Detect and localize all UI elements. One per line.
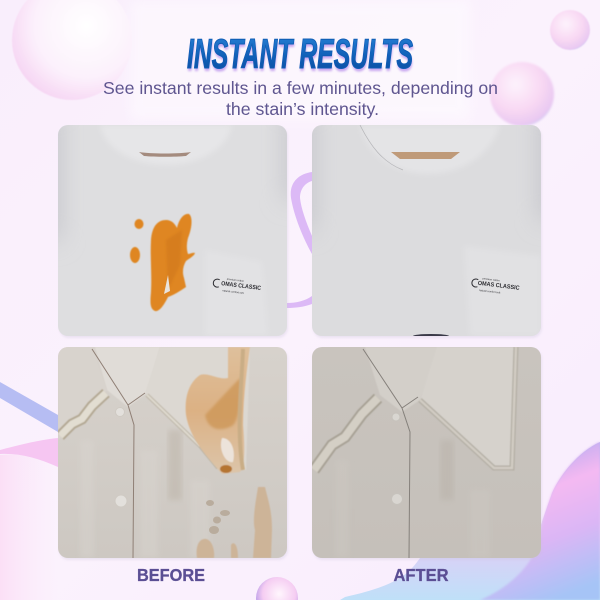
decorative wave: left pink <box>0 438 58 600</box>
shadow at hem <box>413 334 449 336</box>
shirt pocket seam <box>464 246 541 336</box>
right lace edging <box>420 347 516 468</box>
title: INSTANT RESULTS <box>188 33 414 80</box>
decorative sphere: top right <box>550 10 590 50</box>
title: INSTANT RESULTS <box>187 30 413 77</box>
shirt collar <box>139 152 191 157</box>
right collar flap <box>148 388 248 468</box>
printed logo label: premium cotton <box>482 277 500 282</box>
panel: after, clean t-shirt <box>312 125 541 336</box>
panel edge shading <box>58 126 287 236</box>
printed logo label: OMAS CLASSIC <box>477 281 520 292</box>
subtitle text: the stain’s intensity. <box>226 99 379 119</box>
decorative sphere: right of subtitle <box>490 62 554 126</box>
printed logo label: natural comfort soft <box>222 289 244 295</box>
left collar flap <box>58 348 64 354</box>
title <box>187 30 414 80</box>
small spill marks <box>206 500 230 534</box>
right collar flap <box>420 347 516 470</box>
soft fold shadows <box>168 430 182 500</box>
blouse buttons <box>115 408 127 507</box>
label: after: AFTER <box>394 565 449 585</box>
subtitle text: See instant results in a few minutes, depending on <box>103 78 498 98</box>
label: before: BEFORE <box>137 565 205 585</box>
stain gap highlight <box>164 275 170 294</box>
panel shadows <box>59 127 542 560</box>
blouse buttons <box>392 414 402 504</box>
decorative sphere: bottom <box>256 577 298 600</box>
fabric light stripes <box>80 440 210 558</box>
blouse gathered yoke <box>95 347 160 407</box>
shirt collar <box>360 125 460 170</box>
right lace edging <box>147 395 218 468</box>
fabric light stripes <box>335 460 490 558</box>
placket seam <box>92 349 145 558</box>
printed logo label <box>212 278 261 294</box>
printed logo label: premium cotton <box>227 278 245 283</box>
orange stain <box>130 214 195 311</box>
decorative blob: bottom right <box>340 442 600 600</box>
bottom drip stains <box>197 487 272 558</box>
placket seam <box>363 349 418 558</box>
decorative ribbon: left blue <box>0 382 58 432</box>
panel: before, t-shirt with orange stain <box>58 125 287 336</box>
decorative sphere: top left <box>12 0 132 100</box>
large brown stain <box>186 347 250 474</box>
left lace edging <box>314 398 378 470</box>
panel: before, blouse with brown stain <box>58 347 287 558</box>
faint fold shadow <box>442 443 452 497</box>
panel: after, clean blouse <box>312 347 541 558</box>
decorative ribbon: centre <box>287 172 312 308</box>
shirt pocket seam <box>205 250 268 336</box>
left lace edging <box>60 393 106 436</box>
printed logo label: OMAS CLASSIC <box>221 281 262 292</box>
printed logo label: natural comfort soft <box>479 289 501 295</box>
blouse gathered yoke <box>365 347 440 412</box>
subtitle text <box>103 78 498 119</box>
stain dark core <box>168 234 180 282</box>
printed logo label <box>471 278 520 294</box>
panel edge shading <box>312 126 541 224</box>
